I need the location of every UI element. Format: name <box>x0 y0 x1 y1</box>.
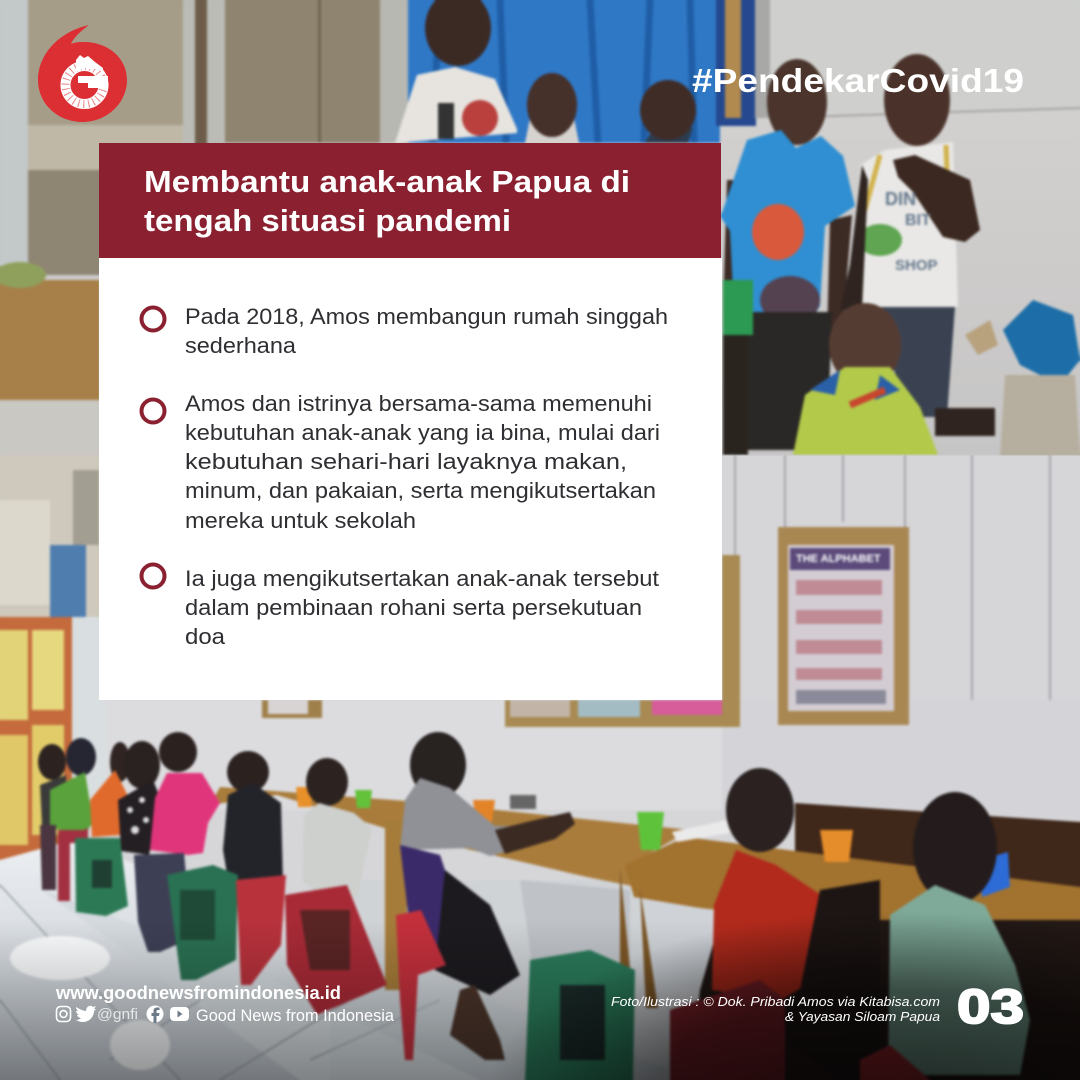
items on table <box>637 812 664 850</box>
wall below table <box>520 880 630 1020</box>
photo: children standing in the room (top): DIN <box>885 189 916 209</box>
bullet item 3: Ia juga mengikutsertakan anak-anak tersebut <box>185 566 660 591</box>
footer: website and social handles <box>55 983 395 1025</box>
brand name: Good News from Indonesia <box>196 1006 395 1025</box>
photo: children standing in the room (top): BIT <box>905 212 931 229</box>
bench + bag <box>935 408 995 436</box>
dark wainscot <box>795 803 1080 1080</box>
bullet item 2: kebutuhan sehari-hari layaknya makan, <box>185 449 627 474</box>
wall planks <box>735 457 1050 720</box>
heading: Membantu anak-anak Papua di <box>144 164 630 199</box>
bullet item 1 <box>142 304 668 358</box>
hashtag: #PendekarCovid19 <box>692 62 1024 99</box>
icon: instagram <box>56 1006 70 1022</box>
green kid at left edge <box>723 280 753 335</box>
bullet item 3: dalam pembinaan rohani serta persekutuan <box>185 595 642 620</box>
icon: GNFI logo <box>38 25 127 122</box>
bullet item 1: sederhana <box>185 333 297 358</box>
photo: children at the classroom table (bottom): THE ALPHABET <box>796 553 881 565</box>
floor <box>0 840 700 1080</box>
website url: www.goodnewsfromindonesia.id <box>55 983 341 1003</box>
bullet item 3 <box>142 564 660 649</box>
bullet item 2: kebutuhan anak-anak yang ia bina, mulai dari <box>185 420 660 445</box>
photo: children at the classroom table (bottom) <box>0 457 1080 1080</box>
photo credit <box>611 994 940 1024</box>
icon: twitter <box>76 1006 96 1022</box>
right dark lower area <box>690 920 1080 1080</box>
panel: heading banner <box>99 143 721 258</box>
bullet item 2 <box>142 391 660 533</box>
photo: children standing in the room (top): SHOP <box>895 257 938 274</box>
bullet item 1: Pada 2018, Amos membangun rumah singgah <box>185 304 668 329</box>
bullet item 2: Amos dan istrinya bersama-sama memenuhi <box>185 391 652 416</box>
kid 2 <box>525 113 579 143</box>
page number: 03 <box>957 981 1024 1034</box>
bullet item 3: doa <box>185 624 226 649</box>
small kid front <box>829 303 901 387</box>
panel: white content card <box>99 258 722 700</box>
heading <box>144 164 630 238</box>
kid white tank <box>884 54 950 146</box>
stools <box>40 825 930 1080</box>
handle: @gnfi <box>97 1006 138 1023</box>
icon: facebook <box>146 1006 164 1023</box>
door <box>0 617 72 867</box>
posters <box>778 527 909 725</box>
kid left white shirt <box>395 67 517 143</box>
row of children <box>38 732 1030 1080</box>
photo dark overlay <box>0 900 1080 1080</box>
photo: children standing in the room (top) <box>0 0 1080 458</box>
photo credit: Foto/Ilustrasi : © Dok. Pribadi Amos via Kitabisa.com <box>611 994 940 1009</box>
heading: tengah situasi pandemi <box>144 203 511 238</box>
bullet item 2: mereka untuk sekolah <box>185 508 416 533</box>
kid blue shirt <box>723 180 747 340</box>
tables <box>210 787 690 887</box>
kid 3 <box>645 128 693 143</box>
icon: youtube <box>170 1007 189 1021</box>
photo credit: & Yayasan Siloam Papua <box>785 1009 940 1024</box>
bullet item 2: minum, dan pakaian, serta mengikutsertakan <box>185 478 656 503</box>
